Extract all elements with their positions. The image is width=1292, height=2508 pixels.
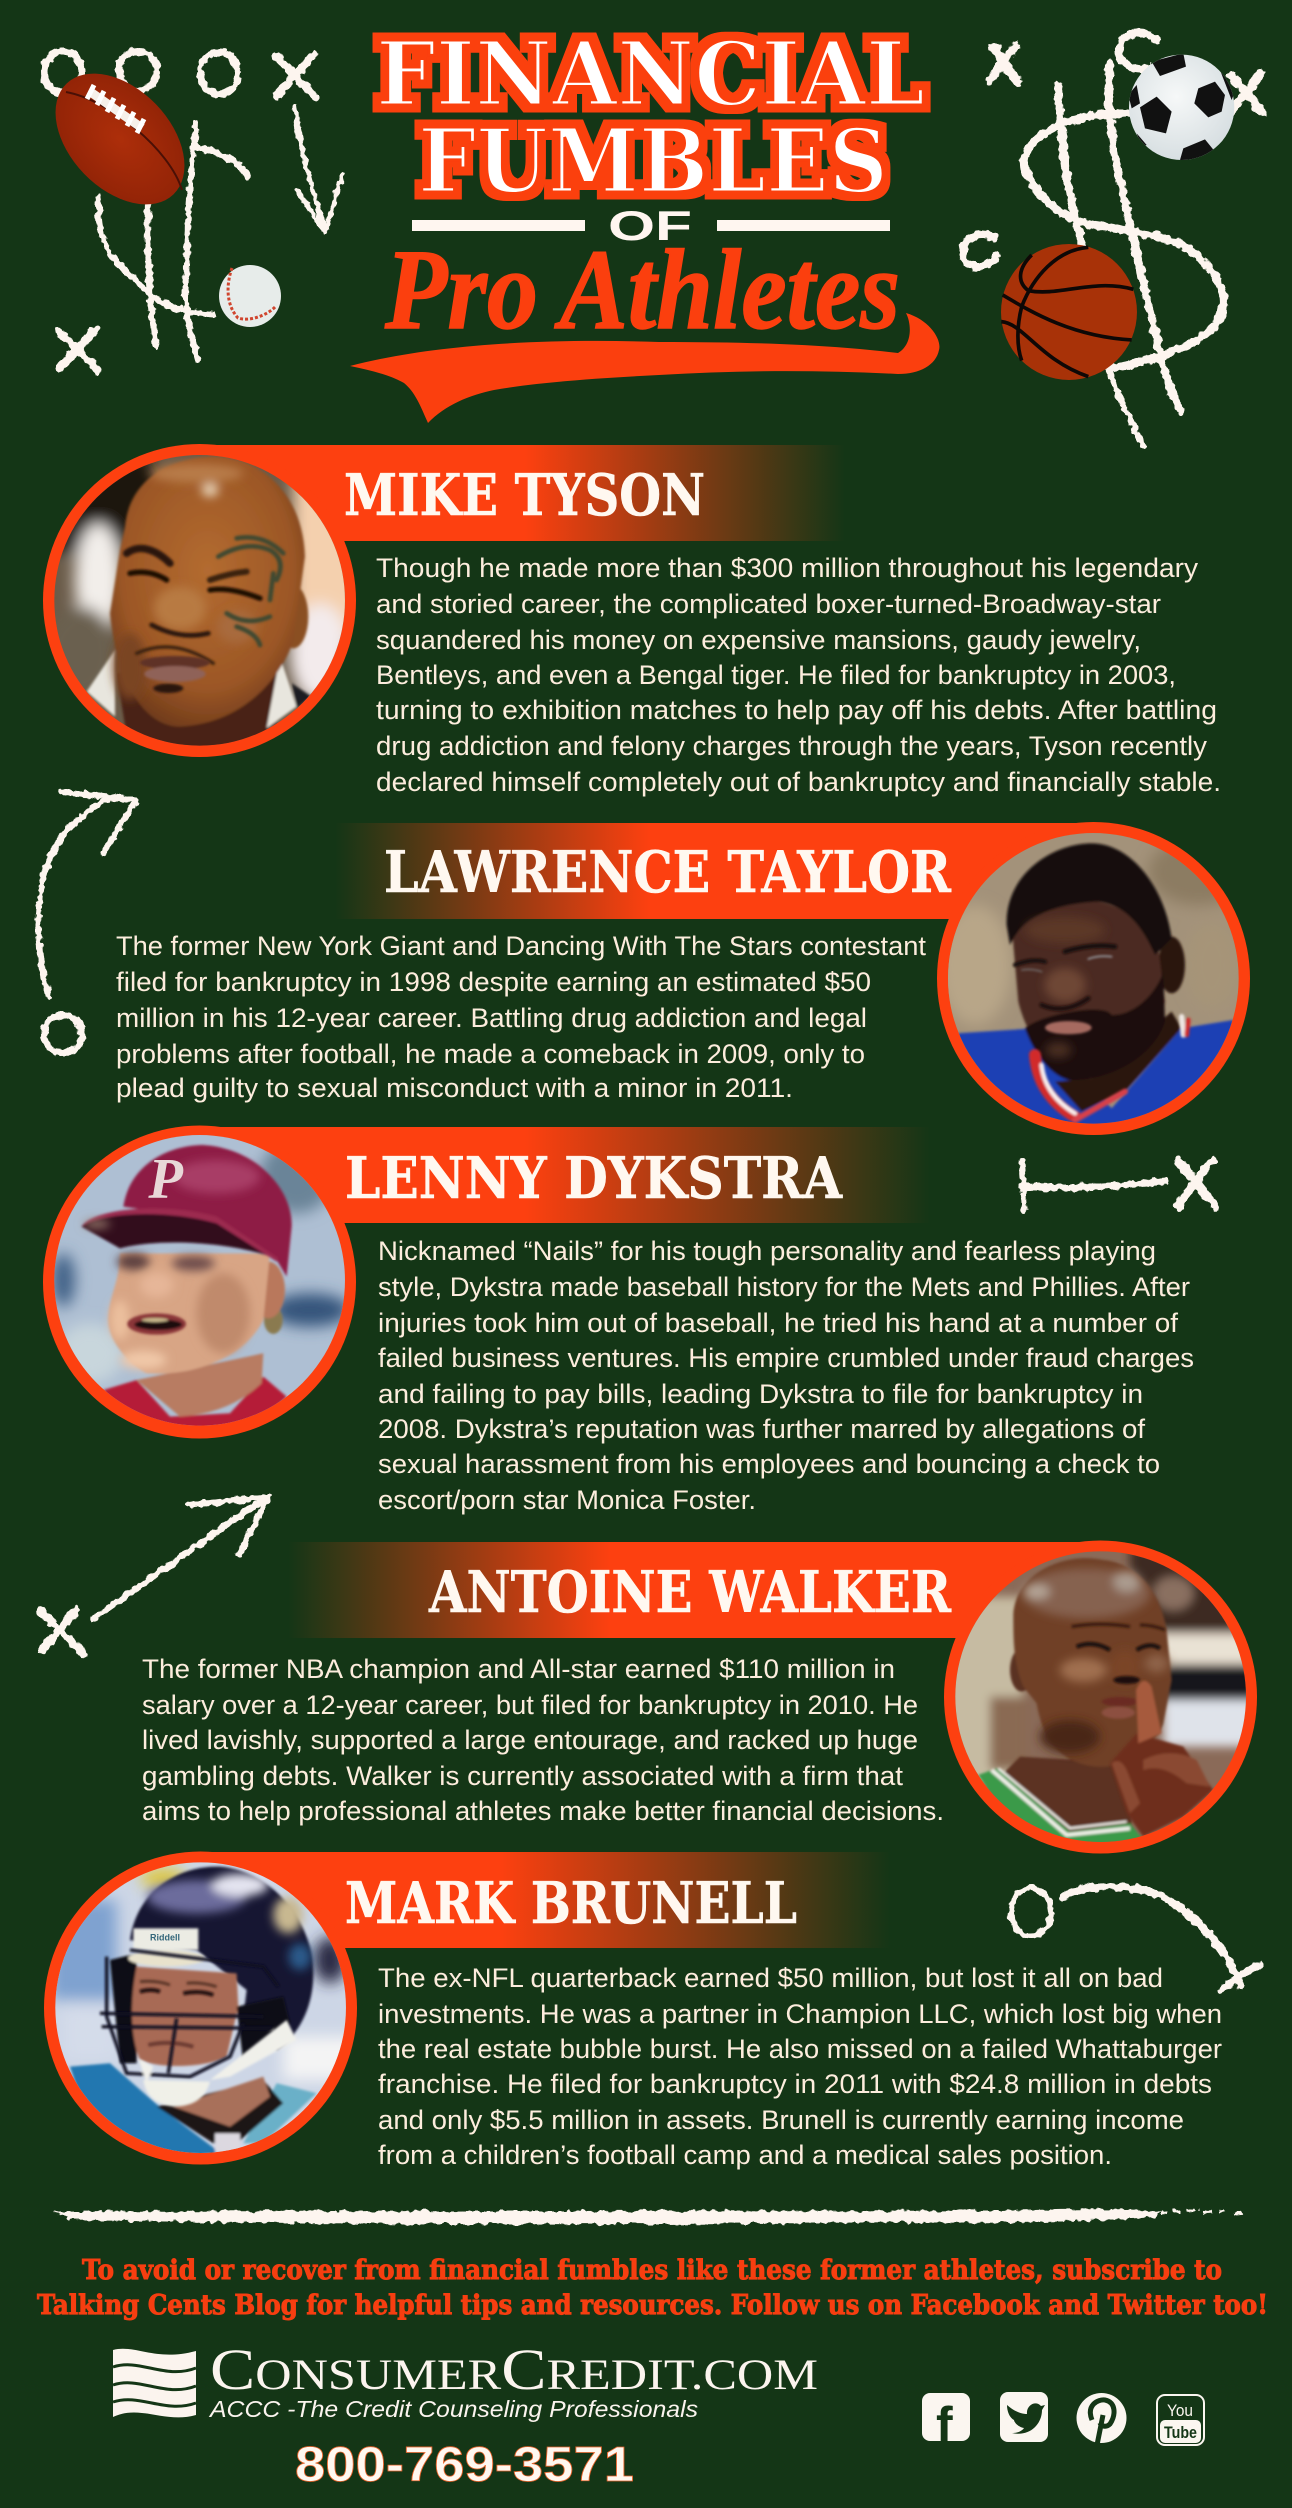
- title line: Pro Athletes: Pro Athletes: [384, 226, 900, 353]
- logo letter on helmet: P: [147, 1148, 183, 1210]
- icon: basketball: [1001, 244, 1137, 380]
- icon: YouTube: You: [1167, 2401, 1193, 2420]
- icon: baseball: [219, 265, 281, 327]
- text: Taylor bio: [116, 931, 926, 1103]
- portrait ring: Antoine Walker: [944, 1540, 1257, 1854]
- text: Walker bio: The former NBA champion and All-star earned $110 million in: [142, 1654, 895, 1684]
- arrow: chalk diagonal arrow with X: [40, 1497, 268, 1654]
- panel: Lawrence Taylor: [116, 815, 1265, 1155]
- arrow: chalk curved arrow with circle: [38, 792, 136, 1053]
- icon: Facebook: f: [936, 2397, 953, 2453]
- name: Mike Tyson: MIKE TYSON: [344, 462, 705, 529]
- text: Walker bio: gambling debts. Walker is currently associated with a firm that: [142, 1761, 904, 1791]
- chalk play diagram: right header dollar sign: [963, 32, 1262, 445]
- text: Taylor bio: The former New York Giant and Dancing With The Stars contestant: [116, 931, 926, 961]
- chalk play mark: bar and X: [1022, 1160, 1215, 1212]
- logo wordmark: CONSUMER CREDIT.COM: [210, 2337, 818, 2402]
- text: Walker bio: aims to help professional athletes make better financial decisions.: [142, 1796, 944, 1826]
- phone number: 800-769-3571: [295, 2438, 634, 2492]
- banner: Mike Tyson: [200, 445, 850, 541]
- text: Walker bio: lived lavishly, supported a large entourage, and racked up huge: [142, 1725, 918, 1755]
- name: Mark Brunell: MARK BRUNELL: [345, 1870, 797, 1937]
- text: Taylor bio: plead guilty to sexual misconduct with a minor in 2011.: [116, 1073, 793, 1103]
- text: Brunell bio: from a children’s football camp and a medical sales position.: [378, 2140, 1112, 2170]
- logo: ConsumerCredit.com: [113, 2337, 818, 2422]
- portrait ring: Lawrence Taylor: [937, 822, 1250, 1135]
- logo tagline: ACCC -The Credit Counseling Professionals: [208, 2396, 699, 2422]
- icon: YouTube: Tube: [1164, 2423, 1197, 2442]
- portrait ring: Mike Tyson: [43, 444, 356, 757]
- text: Brunell bio: franchise. He filed for bankruptcy in 2011 with $24.8 million in debts: [378, 2069, 1212, 2099]
- title line: Fumbles: FUMBLES: [418, 108, 888, 213]
- banner: Mark Brunell: [200, 1852, 895, 1948]
- icon: Facebook: [922, 2393, 970, 2453]
- banner: Lawrence Taylor: [335, 823, 1095, 919]
- text: Brunell bio: The ex-NFL quarterback earned $50 million, but lost it all on bad: [378, 1963, 1163, 1993]
- portrait ring: Lenny Dykstra: [43, 1126, 356, 1438]
- text: Dykstra bio: and failing to pay bills, leading Dykstra to file for bankruptcy in: [378, 1379, 1143, 1409]
- icon: football: [31, 49, 209, 229]
- panel: Mike Tyson: [27, 433, 1221, 797]
- text: Taylor bio: million in his 12-year career. Battling drug addiction and legal: [116, 1003, 867, 1033]
- text: Brunell bio: investments. He was a partner in Champion LLC, which lost big when: [378, 1999, 1222, 2029]
- text: Dykstra bio: style, Dykstra made baseball history for the Mets and Phillies. After: [378, 1272, 1190, 1302]
- photo: Mark Brunell: [55, 1862, 346, 2153]
- panel: Lenny Dykstra: [30, 1120, 1194, 1515]
- photo: Mike Tyson: [54, 455, 345, 746]
- portrait ring: Mark Brunell: [44, 1852, 357, 2164]
- text: Walker bio: salary over a 12-year career, but filed for bankruptcy in 2010. He: [142, 1690, 918, 1720]
- title: [350, 21, 939, 423]
- photo: Lawrence Taylor: [948, 833, 1239, 1124]
- text: Brunell bio: and only $5.5 million in assets. Brunell is currently earning income: [378, 2105, 1184, 2135]
- call to action: [37, 2255, 1268, 2321]
- text: Tyson bio: declared himself completely out of bankruptcy and financially stable.: [376, 767, 1221, 797]
- title line: Of with rules: [412, 202, 890, 249]
- arrow: chalk curved arrow with circle: [1011, 1887, 1260, 1990]
- text: Tyson bio: drug addiction and felony charges through the years, Tyson recently: [376, 731, 1207, 761]
- text: Dykstra bio: [378, 1236, 1194, 1515]
- text: Tyson bio: squandered his money on expensive mansions, gaudy jewelry,: [376, 625, 1141, 655]
- text: Tyson bio: Though he made more than $300 million throughout his legendary: [376, 553, 1199, 583]
- text: Brunell bio: the real estate bubble burst. He also missed on a failed Whattaburger: [378, 2034, 1222, 2064]
- call to action: To avoid or recover from financial fumbles like these former athletes, subscribe to: [82, 2255, 1222, 2286]
- helmet brand: Riddell: [150, 1933, 180, 1943]
- photo: Lenny Dykstra: [54, 1135, 345, 1426]
- title line: Of with rules: OF: [608, 202, 692, 249]
- text: Tyson bio: [376, 553, 1221, 797]
- name: Lawrence Taylor: LAWRENCE TAYLOR: [384, 839, 952, 906]
- icon: YouTube: [1157, 2395, 1204, 2445]
- text: Dykstra bio: 2008. Dykstra’s reputation was further marred by allegations of: [378, 1414, 1146, 1444]
- text: Taylor bio: filed for bankruptcy in 1998 despite earning an estimated $50: [116, 967, 871, 997]
- icon: waves: [113, 2349, 196, 2417]
- name: Antoine Walker: ANTOINE WALKER: [428, 1559, 952, 1626]
- chalk play diagram: left header: [44, 51, 342, 370]
- text: Dykstra bio: injuries took him out of baseball, he tried his hand at a number of: [378, 1308, 1179, 1338]
- text: Tyson bio: Bentleys, and even a Bengal tiger. He filed for bankruptcy in 2003,: [376, 660, 1176, 690]
- icon: Pinterest: [1076, 2393, 1126, 2445]
- text: Tyson bio: turning to exhibition matches to help pay off his debts. After battling: [376, 695, 1217, 725]
- divider: chalk line: [53, 2209, 1245, 2224]
- banner: Lenny Dykstra: [200, 1127, 935, 1223]
- panel: Mark Brunell: [30, 1850, 1222, 2183]
- banner: Antoine Walker: [288, 1542, 1103, 1638]
- text: Walker bio: [142, 1654, 944, 1826]
- icon: soccer ball: [1128, 53, 1237, 162]
- text: Tyson bio: and storied career, the complicated boxer-turned-Broadway-star: [376, 589, 1161, 619]
- name: Lenny Dykstra: LENNY DYKSTRA: [345, 1145, 843, 1212]
- title swoosh: [350, 313, 939, 423]
- panel: Antoine Walker: [142, 1530, 1270, 1870]
- text: Dykstra bio: Nicknamed “Nails” for his tough personality and fearless playing: [378, 1236, 1156, 1266]
- text: Taylor bio: problems after football, he made a comeback in 2009, only to: [116, 1039, 865, 1069]
- text: Dykstra bio: failed business ventures. His empire crumbled under fraud charges: [378, 1343, 1194, 1373]
- text: Brunell bio: [378, 1963, 1222, 2170]
- photo: Antoine Walker: [955, 1551, 1246, 1842]
- title line: Financial: FINANCIAL: [376, 21, 925, 126]
- text: Dykstra bio: sexual harassment from his employees and bouncing a check to: [378, 1449, 1160, 1479]
- social icons: [922, 2392, 1204, 2453]
- icon: Twitter: [1000, 2392, 1048, 2442]
- text: Dykstra bio: escort/porn star Monica Foster.: [378, 1485, 756, 1515]
